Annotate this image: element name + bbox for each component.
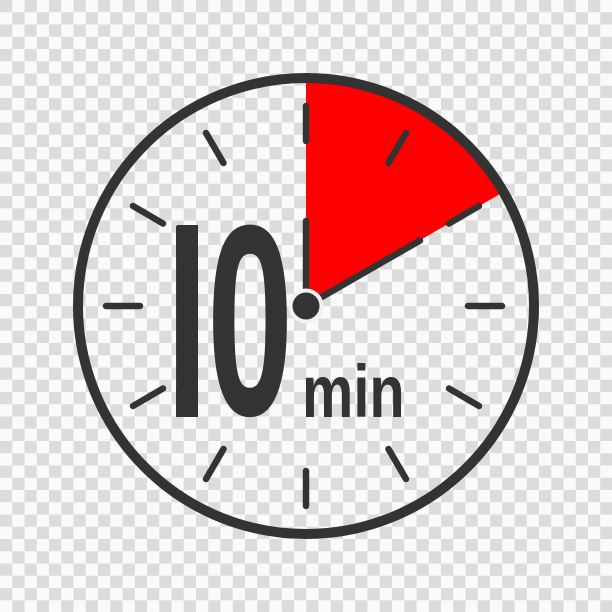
big number 10: 1	[137, 165, 230, 476]
hour tick marks	[106, 106, 502, 506]
big number 10	[176, 224, 287, 418]
big number 10: 0	[207, 169, 293, 472]
center hub	[292, 292, 320, 320]
red 10 minute sector	[306, 78, 504, 306]
clock hands	[306, 221, 420, 306]
hub halo	[288, 288, 324, 324]
clock outer ring	[78, 78, 534, 534]
unit label min: min	[302, 351, 405, 434]
